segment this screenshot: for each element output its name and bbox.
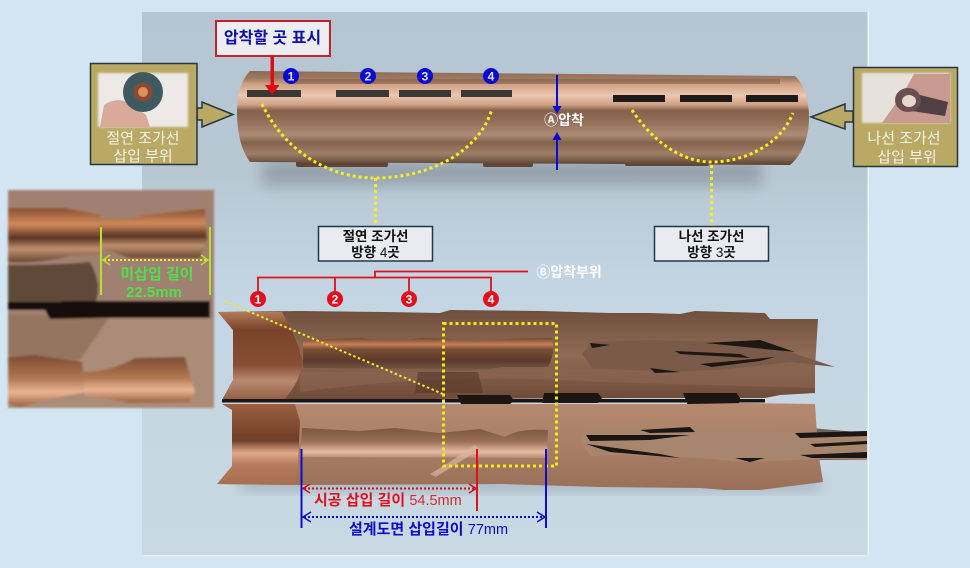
sleeve top band (290, 79, 780, 84)
callout arrow (197, 102, 233, 127)
annotation: compression A: Ⓐ압착 (544, 112, 584, 128)
label: insulated side 4 spots: 절연 조가선 (343, 229, 408, 244)
yellow selection box (444, 324, 556, 466)
marker 3: 3 (422, 70, 429, 84)
dimension: design insertion length (302, 449, 546, 538)
bracket: compression spots B (250, 264, 602, 307)
marker 1: 1 (288, 70, 295, 84)
callout: mark compression spot: 압착할 곳 표시 (224, 29, 321, 47)
photo: bare conductor end (862, 73, 950, 123)
inset photo: close-up (8, 190, 214, 408)
callout box (90, 64, 197, 164)
cable end (800, 428, 867, 460)
marker 2 (327, 291, 343, 307)
callout: bare conductor insertion: 삽입 부위 (877, 149, 937, 166)
inset upper wire left (8, 208, 100, 262)
inset annotation: un-inserted length (101, 227, 210, 301)
sleeve lower tabs (296, 160, 709, 167)
label: bare side 3 spots (654, 226, 768, 261)
bracket label: Ⓑ압착부위 (536, 264, 602, 280)
yellow curve: bare side (632, 110, 793, 226)
blue number markers (283, 68, 499, 84)
slots on bare side (613, 95, 798, 102)
dimension: construction insertion length: 시공 삽입 길이 54.5mm (314, 492, 462, 509)
slots on insulated side (247, 90, 512, 97)
yellow pointer to inset (222, 300, 443, 394)
wire strand (303, 338, 553, 370)
conductor right side (582, 340, 835, 372)
marker 4 (483, 68, 499, 84)
conductor right side (580, 428, 867, 462)
inset annotation: un-inserted length: 미삽입 길이 (120, 266, 194, 283)
arrow: mark pointer (265, 56, 280, 95)
inset dark shade (8, 262, 98, 303)
label: bare side 3 spots: 방향 3곳 (687, 245, 736, 260)
panel: cut sleeve, lower half (217, 403, 867, 490)
cup bore (217, 404, 300, 485)
lower shadow (240, 478, 820, 490)
marker 4 (483, 291, 499, 307)
yellow curve: insulated side (262, 104, 492, 226)
marker 3: 3 (406, 292, 413, 306)
wire strand (300, 428, 548, 458)
callout: bare conductor insertion (811, 68, 958, 166)
callout arrow (811, 104, 853, 129)
callout label: 절연 조가선 (106, 130, 180, 147)
label: bare side 3 spots: 나선 조가선 (679, 229, 744, 244)
marker 2: 2 (365, 70, 372, 84)
marker 3 (417, 68, 433, 84)
lower half body (217, 403, 823, 490)
inset annotation: un-inserted length: 22.5mm (126, 284, 182, 301)
inset upper wire right (100, 209, 207, 258)
marker 1 (250, 291, 266, 307)
marker 1 (283, 68, 299, 84)
central bright streak (300, 365, 815, 392)
label: insulated side 4 spots (318, 226, 432, 261)
marker 4: 4 (488, 70, 495, 84)
marker 3 (401, 291, 417, 307)
callout: insulated conductor insertion (90, 64, 233, 165)
callout: insulated conductor insertion: 삽입 부위 (113, 148, 173, 165)
inset lower wire left (8, 355, 86, 407)
inset lower right lighter area (8, 318, 214, 408)
inset background (8, 190, 214, 408)
marker 2 (360, 68, 376, 84)
marker 1: 1 (255, 292, 262, 306)
dimension: design insertion length: 설계도면 삽입길이 77mm (349, 521, 508, 538)
callout: mark compression spot (216, 21, 330, 56)
callout box (854, 68, 958, 166)
inset lower shade (8, 315, 110, 360)
callout label: 나선 조가선 (867, 130, 941, 147)
dark shade under wire (415, 372, 483, 393)
label: insulated side 4 spots: 방향 4곳 (351, 245, 400, 260)
cup bore (218, 312, 303, 400)
top tube shadow (262, 160, 762, 186)
photo: insulated conductor end (98, 72, 188, 127)
upper half body (218, 310, 818, 400)
inset lower wire right (84, 357, 195, 403)
marker 4: 4 (488, 292, 495, 306)
panel: intact copper sleeve (237, 71, 809, 167)
panel: photo backdrop (142, 12, 869, 556)
panel: gap slots between halves (222, 393, 765, 406)
cracked highlights on lower half (430, 445, 480, 477)
inset dark gap (8, 301, 210, 319)
dimension: construction insertion length (303, 449, 477, 511)
black strands (586, 427, 867, 462)
marker 2: 2 (332, 292, 339, 306)
black strands (590, 340, 795, 373)
annotation: compression A (544, 75, 584, 170)
panel: cut sleeve, upper half (218, 310, 835, 400)
sleeve body (237, 71, 809, 165)
